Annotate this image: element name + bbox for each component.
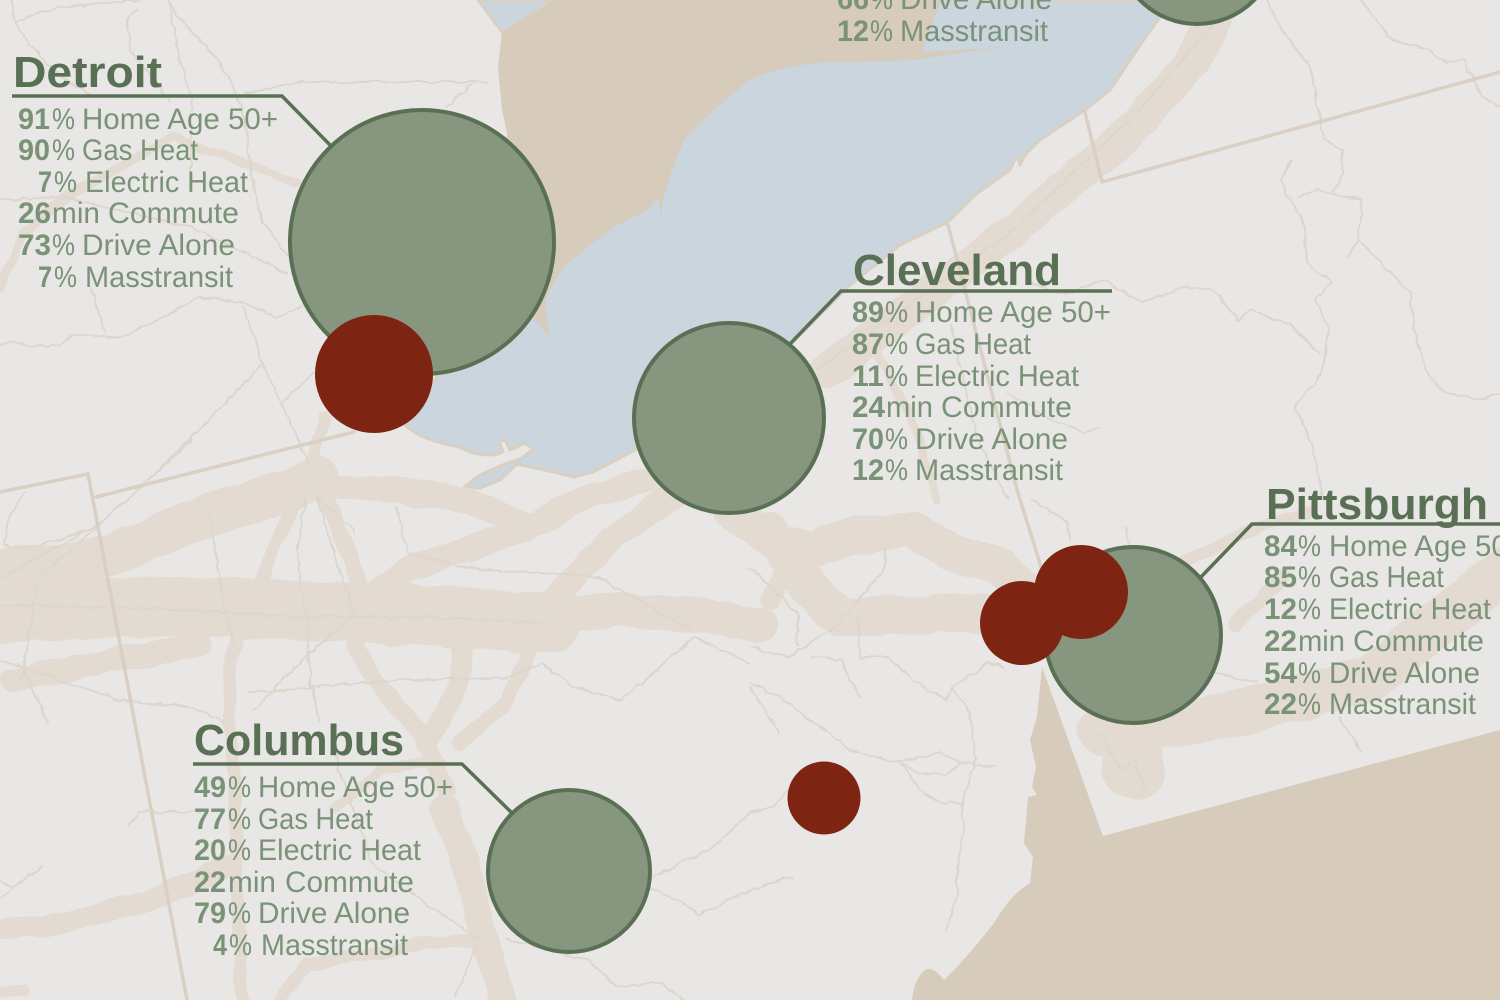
city: top partial <box>837 0 1277 48</box>
stats: 54 <box>1264 657 1297 690</box>
stats: 11 <box>852 360 884 393</box>
stats: 20 <box>194 834 226 867</box>
heading: Cleveland <box>853 246 1061 295</box>
leader line <box>1200 524 1500 578</box>
stats: min <box>52 197 100 230</box>
stats: % <box>54 166 77 199</box>
stats: Home Age 50+ <box>82 103 278 136</box>
land: southeast <box>912 667 1500 1000</box>
land: canada <box>498 0 1003 337</box>
stats: Commute <box>1353 625 1484 658</box>
stats: % <box>52 134 75 167</box>
stats: 22 <box>194 866 226 899</box>
stats: Gas Heat <box>915 328 1032 361</box>
stats: Masstransit <box>85 261 234 294</box>
stats: % <box>885 328 908 361</box>
stats: % <box>54 261 77 294</box>
stats: 7 <box>38 166 52 199</box>
stats: Electric Heat <box>915 360 1080 393</box>
leader line <box>12 96 332 147</box>
stats: % <box>229 929 252 962</box>
red marker: large <box>1034 545 1128 639</box>
bubble <box>290 110 554 374</box>
lake: upper left <box>478 0 555 32</box>
leader line <box>193 764 511 812</box>
stats: % <box>1298 530 1321 563</box>
stats: % <box>885 296 908 329</box>
stats: % <box>228 771 251 804</box>
stats: Home Age 50+ <box>915 296 1111 329</box>
stats: 90 <box>18 134 50 167</box>
stats: top city: % <box>870 15 893 48</box>
stats: % <box>885 454 908 487</box>
heading: Pittsburgh <box>1266 480 1488 529</box>
stats: top city: 12 <box>837 15 869 48</box>
city: Detroit <box>12 48 554 433</box>
stats: % <box>1298 593 1321 626</box>
stats: % <box>1298 561 1321 594</box>
stats: min <box>1298 625 1345 658</box>
stats: Drive Alone <box>258 897 410 930</box>
stats: Gas Heat <box>82 134 199 167</box>
stats: 7 <box>38 261 52 294</box>
leader line <box>789 291 1112 345</box>
stats: Drive Alone <box>1329 657 1480 690</box>
stats: 89 <box>852 296 884 329</box>
stats: % <box>228 897 251 930</box>
stats: Home Age 50+ <box>258 771 453 804</box>
bubble: top city <box>1117 0 1277 24</box>
stats: 85 <box>1264 561 1297 594</box>
stats: Commute <box>941 391 1072 424</box>
stats: Electric Heat <box>258 834 422 867</box>
bubble <box>1045 547 1221 723</box>
stats: Masstransit <box>261 929 409 962</box>
stats: 70 <box>852 423 884 456</box>
stats: 77 <box>194 803 226 836</box>
bubble <box>634 323 824 513</box>
heading: Detroit <box>13 48 162 97</box>
red marker: southeast Ohio <box>788 762 860 834</box>
city: Cleveland <box>634 246 1112 513</box>
stats: 22 <box>1264 688 1297 721</box>
stats: Masstransit <box>915 454 1064 487</box>
stats: 49 <box>194 771 226 804</box>
stats <box>194 771 453 962</box>
stats: Gas Heat <box>258 803 374 836</box>
stats <box>18 103 278 294</box>
stats: Commute <box>108 197 239 230</box>
stats: 91 <box>18 103 50 136</box>
stats: 79 <box>194 897 226 930</box>
stats <box>852 296 1111 487</box>
stats: 26 <box>18 197 51 230</box>
stats: % <box>228 834 251 867</box>
stats: % <box>885 360 908 393</box>
stats: 87 <box>852 328 884 361</box>
stats: Masstransit <box>1329 688 1477 721</box>
red marker <box>315 315 433 433</box>
stats: 4 <box>213 929 227 962</box>
stats: top city: Masstransit <box>900 15 1049 48</box>
stats: Drive Alone <box>915 423 1068 456</box>
stats: Electric Heat <box>85 166 249 199</box>
heading: Columbus <box>194 716 404 765</box>
city: Columbus <box>193 716 650 962</box>
lake erie <box>405 0 1172 488</box>
red marker: small <box>980 581 1064 665</box>
stats: 24 <box>852 391 885 424</box>
stats: % <box>885 423 908 456</box>
stats: 73 <box>18 229 51 262</box>
bubble <box>488 790 650 952</box>
stats: min <box>886 391 933 424</box>
stats: Commute <box>285 866 414 899</box>
stats: top city <box>837 0 1052 48</box>
city: Pittsburgh <box>980 480 1500 723</box>
stats: % <box>52 229 75 262</box>
stats: % <box>1298 657 1321 690</box>
stats: % <box>1298 688 1321 721</box>
stats: 84 <box>1264 530 1297 563</box>
stats: % <box>228 803 251 836</box>
stats: 22 <box>1264 625 1297 658</box>
stats: Electric Heat <box>1329 593 1492 626</box>
stats: Gas Heat <box>1329 561 1445 594</box>
stats: % <box>52 103 75 136</box>
stats <box>1264 530 1500 721</box>
stats: min <box>228 866 276 899</box>
stats: 12 <box>852 454 884 487</box>
stats: Drive Alone <box>82 229 235 262</box>
stats: 12 <box>1264 593 1297 626</box>
